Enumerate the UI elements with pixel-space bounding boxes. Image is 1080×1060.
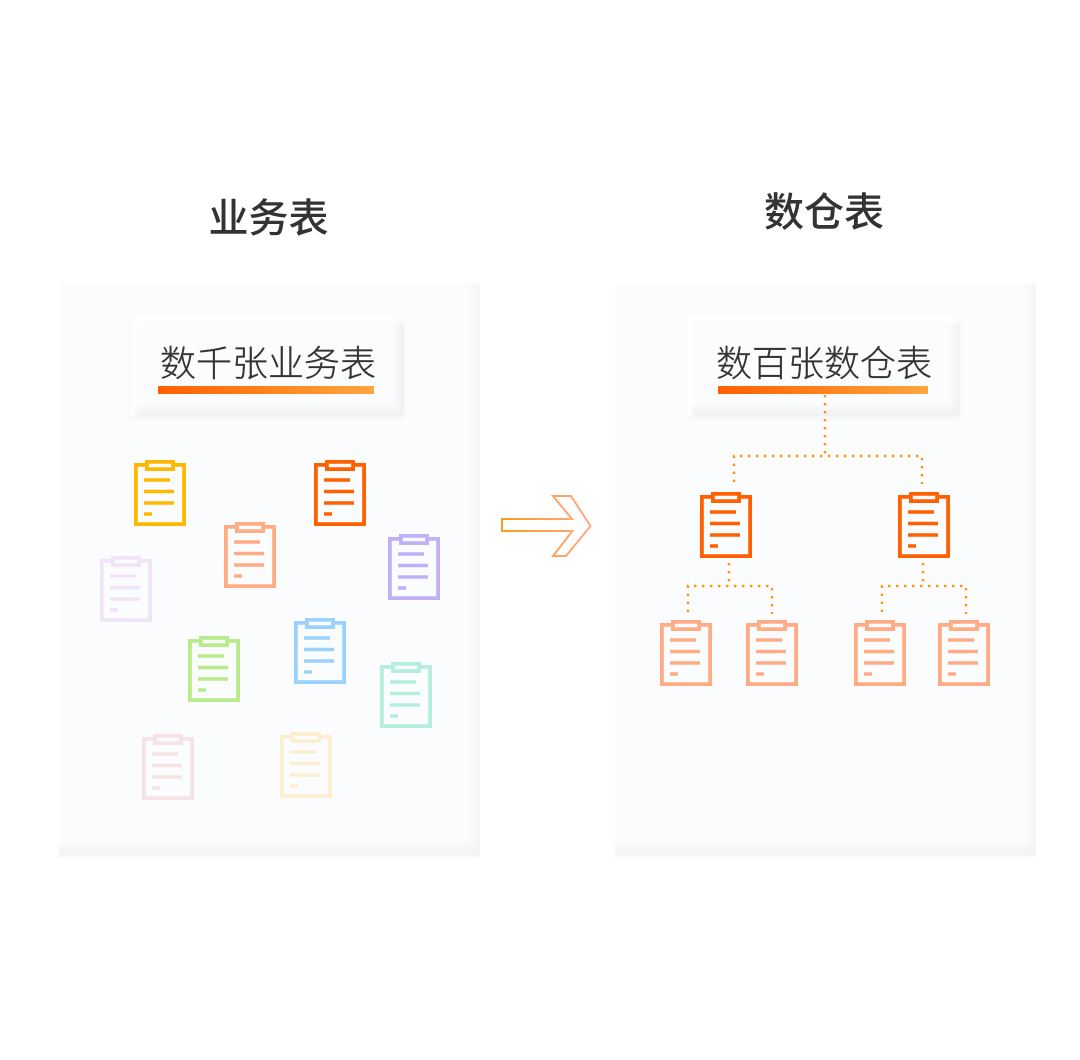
icon: level one right clipboard xyxy=(900,494,948,556)
icon: lilac clipboard xyxy=(102,558,150,620)
icon: cream clipboard xyxy=(282,734,330,796)
underline: right subtitle xyxy=(718,386,928,394)
icon: level two clipboard 1 xyxy=(662,622,710,684)
label box: hundreds of warehouse tables xyxy=(687,318,960,416)
underline: left subtitle xyxy=(158,386,374,394)
label box: thousands of business tables xyxy=(131,318,404,416)
icon: salmon clipboard xyxy=(226,524,274,586)
icon: level one left clipboard xyxy=(702,494,750,556)
icon: pink clipboard xyxy=(144,736,192,798)
icon: green clipboard xyxy=(190,638,238,700)
arrow: business to warehouse xyxy=(502,496,590,556)
heading: business tables: 业务表 xyxy=(208,197,328,241)
icon: purple clipboard xyxy=(390,536,438,598)
icon: teal clipboard xyxy=(382,664,430,726)
icon: level two clipboard 4 xyxy=(940,622,988,684)
icon: orange clipboard xyxy=(316,462,364,524)
icon: level two clipboard 2 xyxy=(748,622,796,684)
connector: left branch xyxy=(688,563,772,614)
icon: blue clipboard xyxy=(296,620,344,682)
connector: right branch xyxy=(882,563,966,614)
subtitle: thousands of business tables: 数千张业务表 xyxy=(160,343,376,384)
heading: warehouse tables: 数仓表 xyxy=(764,191,884,235)
subtitle: hundreds of warehouse tables: 数百张数仓表 xyxy=(716,343,932,384)
panel: business tables xyxy=(56,282,480,856)
icon: yellow clipboard xyxy=(136,462,184,524)
icon: level two clipboard 3 xyxy=(856,622,904,684)
panel: warehouse tables xyxy=(612,282,1036,856)
connector: root to level one xyxy=(734,395,922,484)
